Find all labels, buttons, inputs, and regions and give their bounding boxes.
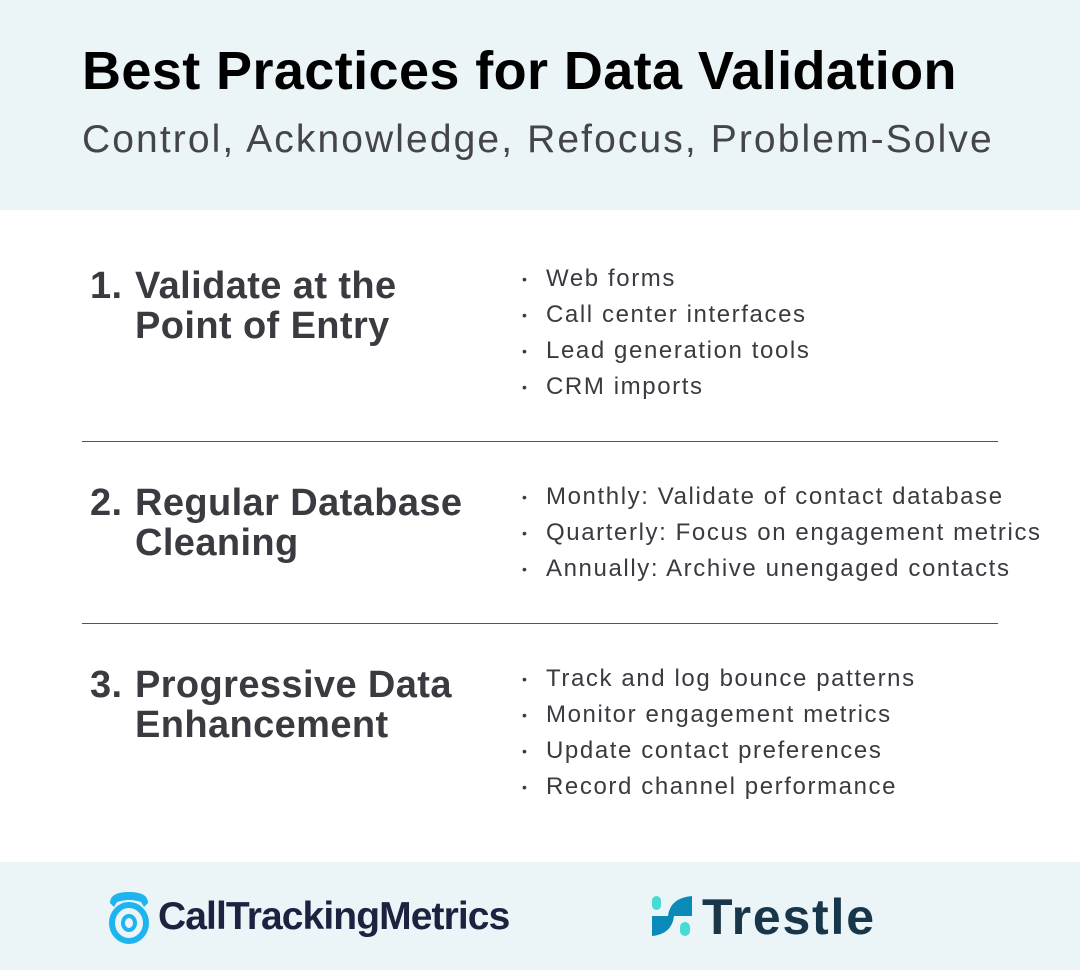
section 1 bullets [522, 265, 810, 400]
logo: Trestle: Trestle [702, 889, 876, 945]
section 1 bullets: Call center interfaces [546, 301, 807, 328]
section 2 heading: 2. [90, 482, 122, 524]
section 1 heading: 1. [90, 265, 122, 307]
section 3 heading: 3. [90, 664, 122, 706]
section 1 heading [90, 265, 397, 347]
section 3 bullets: Record channel performance [546, 773, 897, 800]
section 2 heading: Regular Database [135, 482, 462, 524]
footer band [0, 862, 1080, 970]
section 1 heading: Point of Entry [135, 305, 390, 347]
section 1 heading: Validate at the [135, 265, 397, 307]
section 3 heading: Progressive Data [135, 664, 452, 706]
section 3 bullets: Monitor engagement metrics [546, 701, 892, 728]
section 3 heading [90, 664, 452, 746]
logo: CallTrackingMetrics: CallTrackingMetrics [158, 895, 509, 938]
section 3 bullets: Update contact preferences [546, 737, 882, 764]
header band [0, 0, 1080, 210]
section 2 bullets: Quarterly: Focus on engagement metrics [546, 519, 1042, 546]
section 2 bullets: Annually: Archive unengaged contacts [546, 555, 1011, 582]
title: Best Practices for Data Validation [82, 41, 957, 101]
section 3 bullets: Track and log bounce patterns [546, 665, 916, 692]
section 2 heading [90, 482, 462, 564]
section 1 bullets: Web forms [546, 265, 676, 292]
section 2 bullets [522, 483, 1042, 582]
icon: trestle mark [652, 896, 692, 936]
section 1 bullets: CRM imports [546, 373, 704, 400]
section 2 bullets: Monthly: Validate of contact database [546, 483, 1004, 510]
section 3 heading: Enhancement [135, 704, 389, 746]
subtitle: Control, Acknowledge, Refocus, Problem-Solve [82, 118, 994, 161]
section 2 heading: Cleaning [135, 522, 299, 564]
section 1 bullets: Lead generation tools [546, 337, 810, 364]
section 3 bullets [522, 665, 916, 800]
icon: phone target [109, 892, 149, 944]
